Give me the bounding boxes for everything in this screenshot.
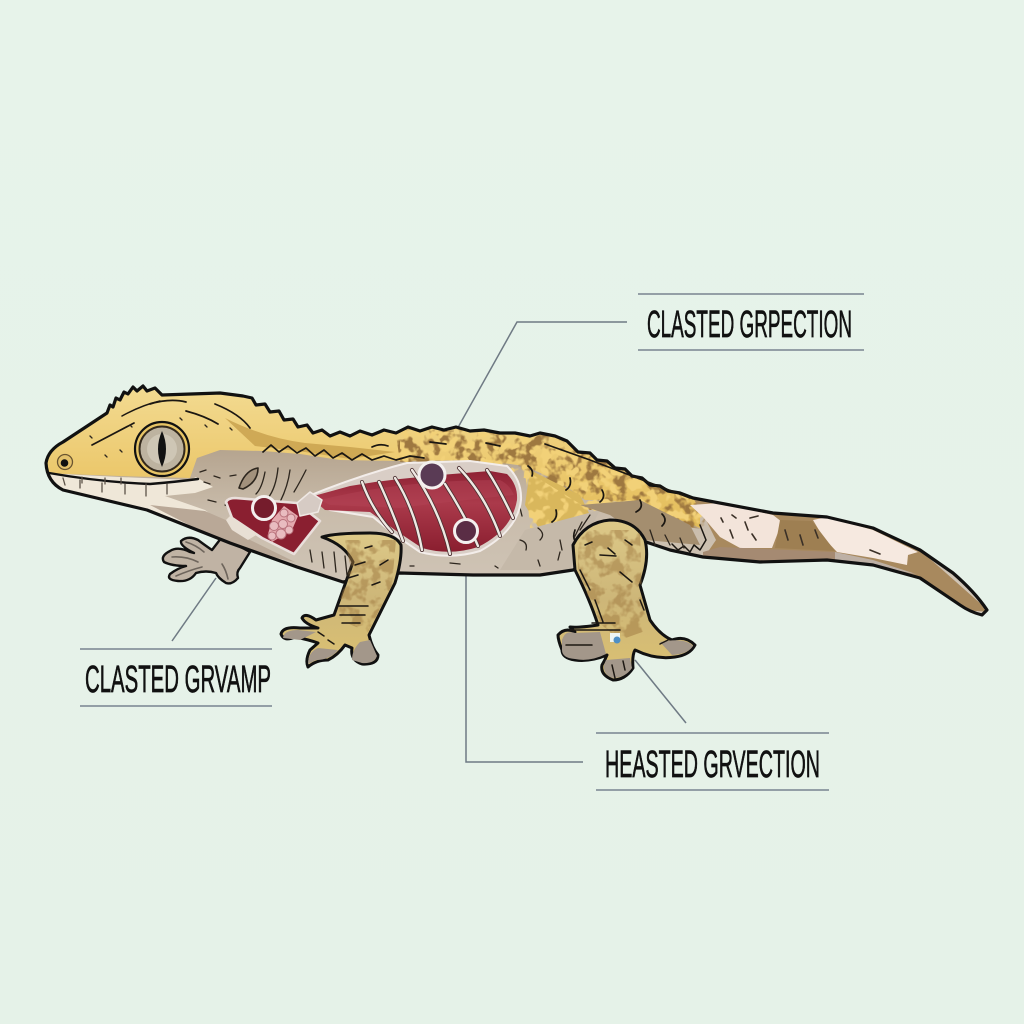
yellow dorsal band — [40, 380, 700, 528]
tail base — [693, 498, 990, 612]
flank grey patch — [500, 510, 600, 570]
body colour zones — [40, 380, 1000, 620]
label: left: CLASTED GRVAMP — [85, 659, 271, 701]
head and flank scale marks — [90, 418, 684, 575]
label: top right — [638, 294, 864, 350]
lip and jaw — [50, 474, 213, 525]
near front leg — [281, 533, 401, 667]
nostril — [58, 454, 72, 470]
label: bottom right — [596, 733, 829, 790]
large red organ with ribs — [306, 461, 521, 556]
label: bottom right: HEASTED GRVECTION — [605, 744, 820, 786]
body silhouette outline — [46, 386, 987, 615]
organ window — [226, 461, 521, 556]
label: left — [80, 649, 272, 706]
back markings — [92, 400, 706, 552]
rear leg — [558, 520, 695, 680]
back mottling dark — [395, 428, 708, 530]
gecko illustration — [40, 380, 1000, 680]
tail markings — [721, 515, 880, 554]
marker: lower organ — [454, 520, 478, 542]
marker: upper organ — [419, 462, 445, 488]
lip line — [49, 473, 198, 496]
back mottling light — [400, 430, 706, 528]
marker: small organ — [252, 496, 276, 520]
eye — [135, 422, 189, 476]
small red organ — [226, 492, 322, 554]
leader lines — [172, 322, 686, 762]
ear opening — [239, 468, 258, 489]
infographic canvas — [44, 293, 989, 791]
darker stripe on neck — [225, 418, 395, 459]
far front leg — [163, 537, 250, 583]
